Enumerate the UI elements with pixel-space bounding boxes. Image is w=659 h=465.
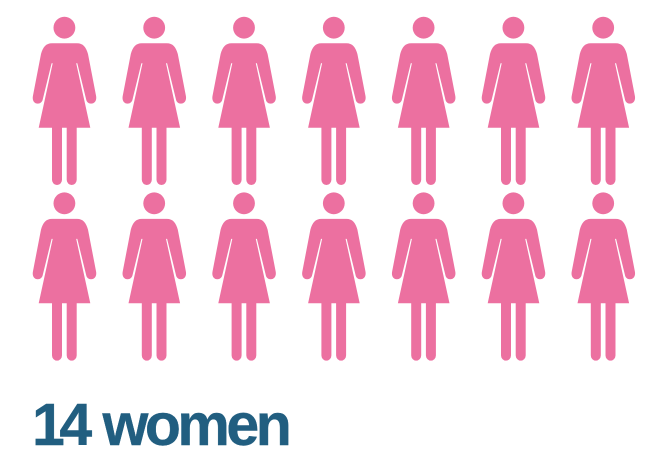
icon: woman 8 [33,192,96,361]
icon: woman 10 [212,192,276,361]
icon: woman 13 [482,192,545,361]
icon: woman 5 [392,17,455,185]
icon: woman 12 [392,192,455,361]
icon: woman 2 [123,17,186,185]
row 2 of women icons [33,192,635,361]
icon: woman 14 [572,192,635,361]
heading: 14 women: women [102,392,289,458]
row 1 of women icons [33,17,635,185]
icon: woman 1 [33,17,96,185]
icon: woman 3 [212,17,276,185]
icon: woman 4 [302,17,366,185]
heading: 14 women: 14 [32,392,92,458]
icon: woman 6 [482,17,545,185]
icon: woman 9 [123,192,186,361]
icon: woman 7 [572,17,635,185]
icon: woman 11 [302,192,366,361]
